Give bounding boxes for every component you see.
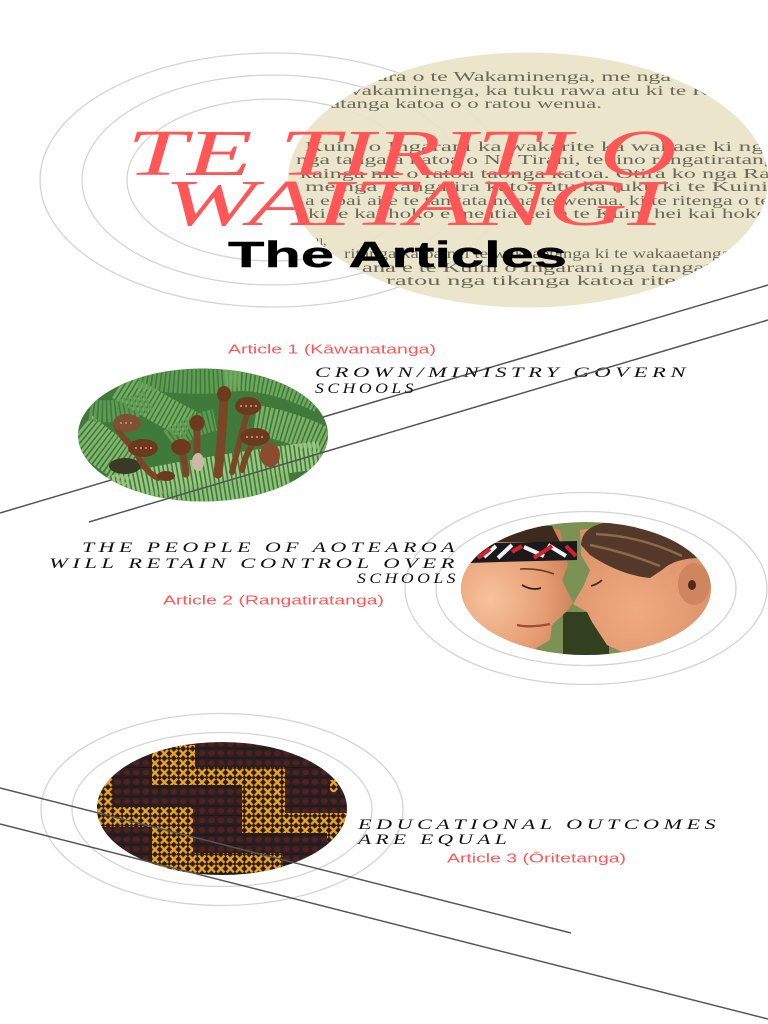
parchment image: treaty document: ki te kai hoko e meatia nei e te Kuini hei kai hoko xyxy=(308,207,768,222)
title: TE TIRITI O xyxy=(127,117,677,190)
parchment image: treaty document: nga tangata katoa o Nu Tirani, te tino rangatiratanga xyxy=(296,153,768,168)
photo: hongi greeting xyxy=(455,520,712,660)
decorative rings around header xyxy=(40,53,506,307)
parchment image: treaty document: vakaminenga, ka tuku rawa atu ki te Kuini xyxy=(350,84,745,99)
diagonal line upper xyxy=(0,285,768,513)
parchment image: treaty document: a me nga Rangatira katoa atu ka tuku ki te Kuini xyxy=(288,180,768,195)
article 1 heading: CROWN/MINISTRY GOVERN xyxy=(315,365,690,381)
article 2 heading: THE PEOPLE OF AOTEAROA xyxy=(82,540,459,556)
article 1 heading: SCHOOLS xyxy=(315,381,417,397)
parchment image: treaty document: ritanga katoa nei te wakaaetanga ki te wakaaetanga k xyxy=(344,247,744,262)
rings: article 2 xyxy=(405,492,767,684)
title: WAITANGI xyxy=(164,167,669,240)
article 3 heading: ARE EQUAL xyxy=(357,832,511,848)
article 1 label: Article 1 (Kāwanatanga) xyxy=(228,342,436,356)
article 2 heading: WILL RETAIN CONTROL OVER xyxy=(49,556,459,572)
parchment image: treaty document: u, xyxy=(316,234,326,249)
subtitle: The Articles xyxy=(228,234,567,275)
article 3 heading: EDUCATIONAL OUTCOMES xyxy=(357,817,720,833)
article 1 heading xyxy=(315,365,690,397)
diagonal line lower xyxy=(89,320,768,522)
article 3 heading xyxy=(357,817,720,848)
rings: article 3 xyxy=(41,714,403,906)
parchment image: treaty document: atanga katoa o o ratou wenua. xyxy=(330,97,602,112)
parchment image: treaty document xyxy=(288,52,768,308)
parchment image: treaty document: ratou nga tikanga katoa rite xyxy=(386,274,676,289)
title xyxy=(127,117,677,240)
diagonal lines lower section xyxy=(0,788,768,1019)
photo: woven tukutuku panel xyxy=(97,742,347,876)
article 3 label: Article 3 (Ōritetanga) xyxy=(447,852,626,866)
article 2 heading: SCHOOLS xyxy=(357,571,459,587)
article 2 label: Article 2 (Rangatiratanga) xyxy=(163,594,384,608)
parchment image: treaty document: ana e te Kuini o Ingarani nga tangata xyxy=(362,261,723,276)
parchment image: treaty document: Kuini o Ingarani ka wakarite ka wakaae ki nga xyxy=(305,140,768,155)
photo: koru fern fronds xyxy=(78,368,330,505)
parchment image: treaty document: a e pai ai e te tangata nona te wenua, ki te ritenga o te xyxy=(305,194,768,209)
article 2 heading xyxy=(49,540,459,587)
parchment image: treaty document: kainga me o ratou taonga katoa. Otira ko nga Ra xyxy=(300,167,768,182)
parchment image: treaty document: ura o te Wakaminenga, me nga xyxy=(376,70,672,85)
